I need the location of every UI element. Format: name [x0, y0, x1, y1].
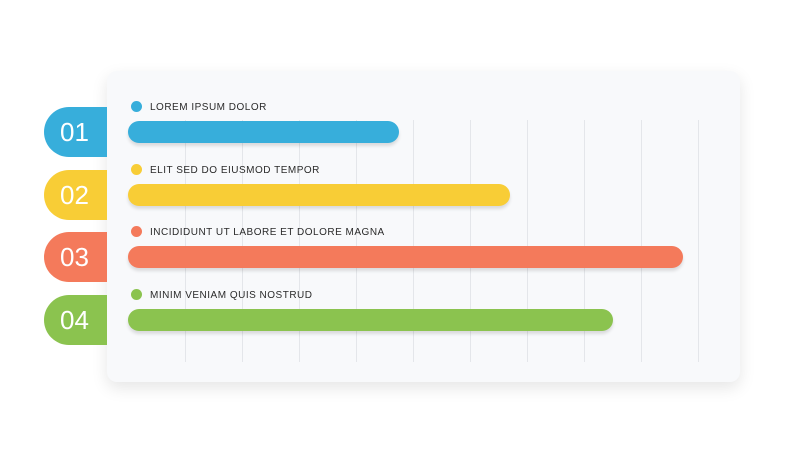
- label 4: MINIM VENIAM QUIS NOSTRUD: [150, 290, 313, 301]
- label 2: ELIT SED DO EIUSMOD TEMPOR: [150, 165, 320, 176]
- tab 04: 04: [60, 305, 89, 335]
- label 3: INCIDIDUNT UT LABORE ET DOLORE MAGNA: [150, 227, 385, 238]
- tab 02: 02: [60, 180, 89, 210]
- label 1: LOREM IPSUM DOLOR: [150, 102, 267, 113]
- tab 01: [44, 107, 107, 157]
- bar 3: [128, 246, 683, 268]
- tab 04: [44, 295, 107, 345]
- bar 4: [128, 309, 613, 331]
- bar 2: [128, 184, 510, 206]
- tab 01: 01: [60, 117, 89, 147]
- tab 03: 03: [60, 242, 89, 272]
- bar 1: [128, 121, 399, 143]
- tab 02: [44, 170, 107, 220]
- tab 03: [44, 232, 107, 282]
- panel: chart card: [107, 71, 740, 382]
